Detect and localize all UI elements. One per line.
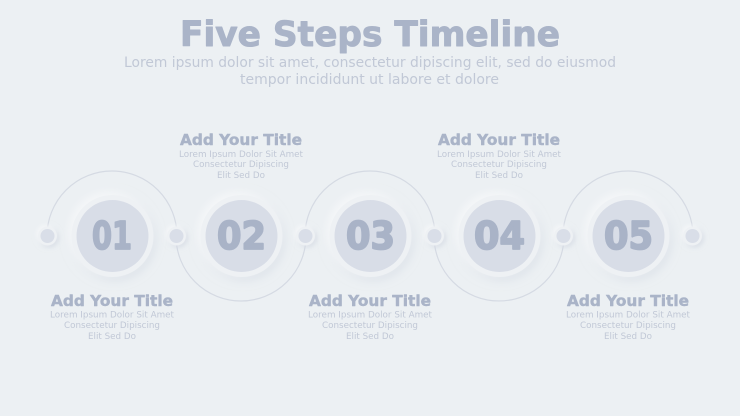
timeline connecting arcs bbox=[47, 171, 693, 301]
step 05 text: Add Your Title bbox=[567, 292, 689, 310]
step 03 text: Elit Sed Do bbox=[346, 331, 394, 342]
step 03 text: Lorem Ipsum Dolor Sit Amet bbox=[308, 310, 432, 320]
step 05 text: Consectetur Dipiscing bbox=[580, 320, 676, 331]
step 01 badge bbox=[72, 195, 154, 277]
subtitle text bbox=[124, 55, 616, 88]
step 04 text bbox=[437, 131, 561, 181]
subtitle text: Lorem ipsum dolor sit amet, consectetur dipiscing elit, sed do eiusmod bbox=[124, 55, 616, 71]
step 04 text: Elit Sed Do bbox=[475, 170, 523, 181]
timeline node dots bbox=[38, 226, 702, 246]
step 05 text: Lorem Ipsum Dolor Sit Amet bbox=[566, 310, 690, 320]
step 03 badge bbox=[330, 195, 412, 277]
step 03 badge: 03 bbox=[346, 214, 395, 258]
step 02 text: Add Your Title bbox=[180, 131, 302, 149]
step 02 badge bbox=[200, 195, 282, 277]
step 01 text: Add Your Title bbox=[51, 292, 173, 310]
step 03 text bbox=[308, 292, 432, 342]
step 04 badge: 04 bbox=[474, 214, 525, 258]
step 01 text: Consectetur Dipiscing bbox=[64, 320, 160, 331]
step 02 text: Elit Sed Do bbox=[217, 170, 265, 181]
step 05 text bbox=[566, 292, 690, 342]
step 01 text bbox=[50, 292, 174, 342]
step 05 badge: 05 bbox=[604, 214, 653, 258]
step 02 text bbox=[179, 131, 303, 181]
step 02 badge: 02 bbox=[217, 214, 266, 258]
step 05 text: Elit Sed Do bbox=[604, 331, 652, 342]
step 04 text: Consectetur Dipiscing bbox=[451, 159, 547, 170]
step 01 badge: 01 bbox=[92, 214, 132, 258]
step 05 badge bbox=[588, 195, 670, 277]
step 04 text: Add Your Title bbox=[438, 131, 560, 149]
step 03 text: Consectetur Dipiscing bbox=[322, 320, 418, 331]
step 01 text: Elit Sed Do bbox=[88, 331, 136, 342]
step 02 text: Lorem Ipsum Dolor Sit Amet bbox=[179, 149, 303, 160]
step 04 badge bbox=[458, 195, 540, 277]
step 02 text: Consectetur Dipiscing bbox=[193, 159, 289, 170]
step 03 text: Add Your Title bbox=[309, 292, 431, 310]
step 01 text: Lorem Ipsum Dolor Sit Amet bbox=[50, 310, 174, 320]
subtitle text: tempor incididunt ut labore et dolore bbox=[240, 72, 499, 88]
step 04 text: Lorem Ipsum Dolor Sit Amet bbox=[437, 149, 561, 160]
title: Five Steps Timeline bbox=[180, 15, 560, 55]
